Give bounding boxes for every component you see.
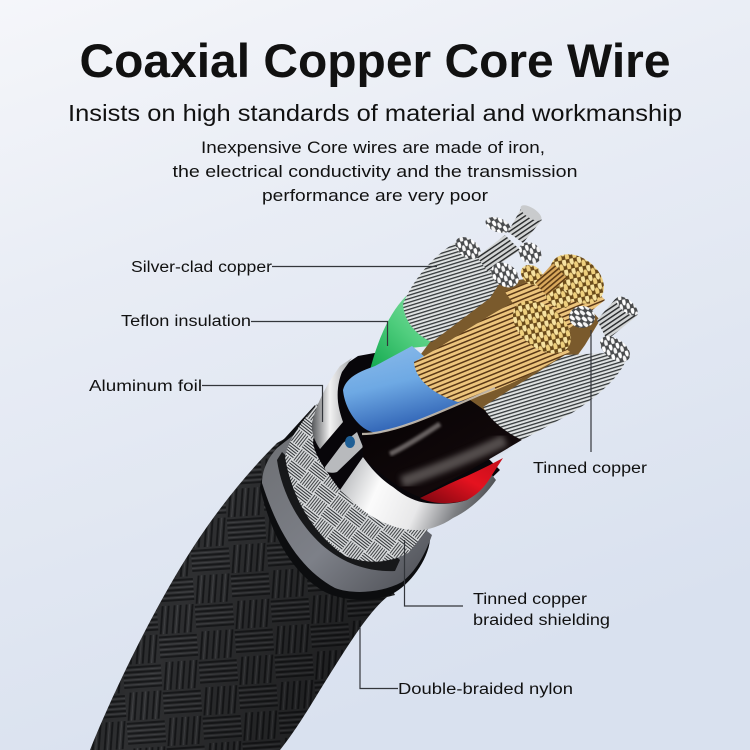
description text: the electrical conductivity and the transmission xyxy=(172,163,578,181)
braided nylon sleeve xyxy=(90,430,395,750)
braided tinned shielding xyxy=(285,403,436,562)
cable illustration xyxy=(90,202,641,750)
foil hatch tab xyxy=(325,432,363,473)
strand backing xyxy=(415,275,600,435)
callout labels: Tinned copper xyxy=(473,591,587,608)
title: Coaxial Copper Core Wire xyxy=(80,34,670,87)
subtitle: Insists on high standards of material and workmanship xyxy=(68,100,682,126)
black strip between ring and braid xyxy=(277,452,400,571)
callout labels: Double-braided nylon xyxy=(398,681,573,698)
red wire xyxy=(420,458,503,503)
foil left strip xyxy=(312,358,352,449)
callout labels: Silver-clad copper xyxy=(131,259,272,276)
description text: Inexpensive Core wires are made of iron, xyxy=(201,139,545,157)
foil rim highlight xyxy=(362,388,495,434)
green wire xyxy=(370,296,440,370)
callout labels: Teflon insulation xyxy=(121,313,251,330)
lower silver strand xyxy=(483,293,641,440)
leader lines xyxy=(202,266,591,688)
callout labels xyxy=(89,259,647,698)
blue dot xyxy=(345,436,355,448)
black wire xyxy=(362,398,525,497)
description text xyxy=(172,139,578,205)
callout labels: Aluminum foil xyxy=(89,378,202,395)
callout labels: braided shielding xyxy=(473,612,610,629)
opening backing xyxy=(313,352,500,518)
description text: performance are very poor xyxy=(262,187,489,205)
blue wire xyxy=(343,346,472,433)
back gold strand xyxy=(505,244,614,332)
dark collar xyxy=(260,405,430,600)
upper silver-clad strand xyxy=(403,202,546,342)
aluminum foil xyxy=(312,352,500,530)
callout labels: Tinned copper xyxy=(533,460,647,477)
silver strand tips xyxy=(483,214,513,236)
foil chrome band xyxy=(340,457,496,530)
main gold strand xyxy=(414,290,581,402)
gray ferrule ring xyxy=(262,430,432,592)
